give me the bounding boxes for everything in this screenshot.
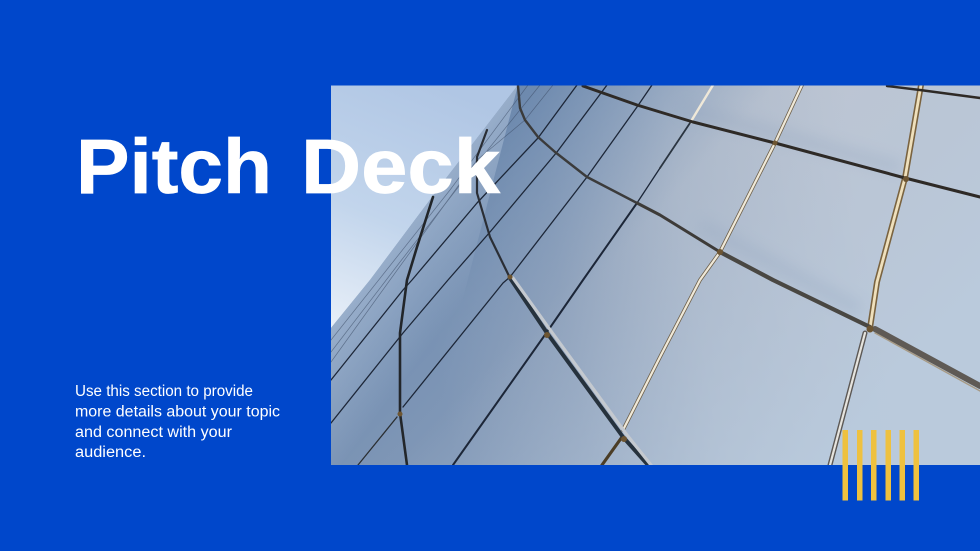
light seams upper diagonals bbox=[690, 85, 713, 123]
joints bbox=[398, 140, 909, 442]
rib: silver band through centre bbox=[477, 130, 651, 465]
body text: and connect with your bbox=[75, 424, 232, 441]
rib: left dark bbox=[400, 197, 433, 465]
curved rib: lower bbox=[518, 86, 637, 203]
body text: more details about your topic bbox=[75, 404, 280, 420]
photo: metal-clad building against sky bbox=[331, 85, 980, 465]
building surface bbox=[331, 85, 980, 465]
fine seams near the building edge bbox=[331, 85, 553, 362]
dark diagonal seams bbox=[331, 85, 660, 465]
body text bbox=[75, 383, 280, 461]
curved rib: top bbox=[887, 86, 980, 98]
title bbox=[76, 124, 500, 210]
body text: audience. bbox=[75, 444, 146, 461]
curved rib: middle bbox=[583, 86, 980, 197]
panel seams bbox=[331, 85, 980, 465]
body text: Use this section to provide bbox=[75, 383, 253, 400]
decorative yellow stripes bbox=[842, 430, 919, 500]
slide canvas bbox=[76, 86, 980, 500]
sky bbox=[331, 86, 517, 328]
title: Pitch bbox=[76, 124, 272, 210]
wide gold seam bbox=[830, 85, 921, 465]
silver-gold diagonal seam bbox=[602, 85, 802, 465]
title: Deck bbox=[301, 124, 500, 210]
soft shadows above the ribs bbox=[804, 141, 889, 304]
